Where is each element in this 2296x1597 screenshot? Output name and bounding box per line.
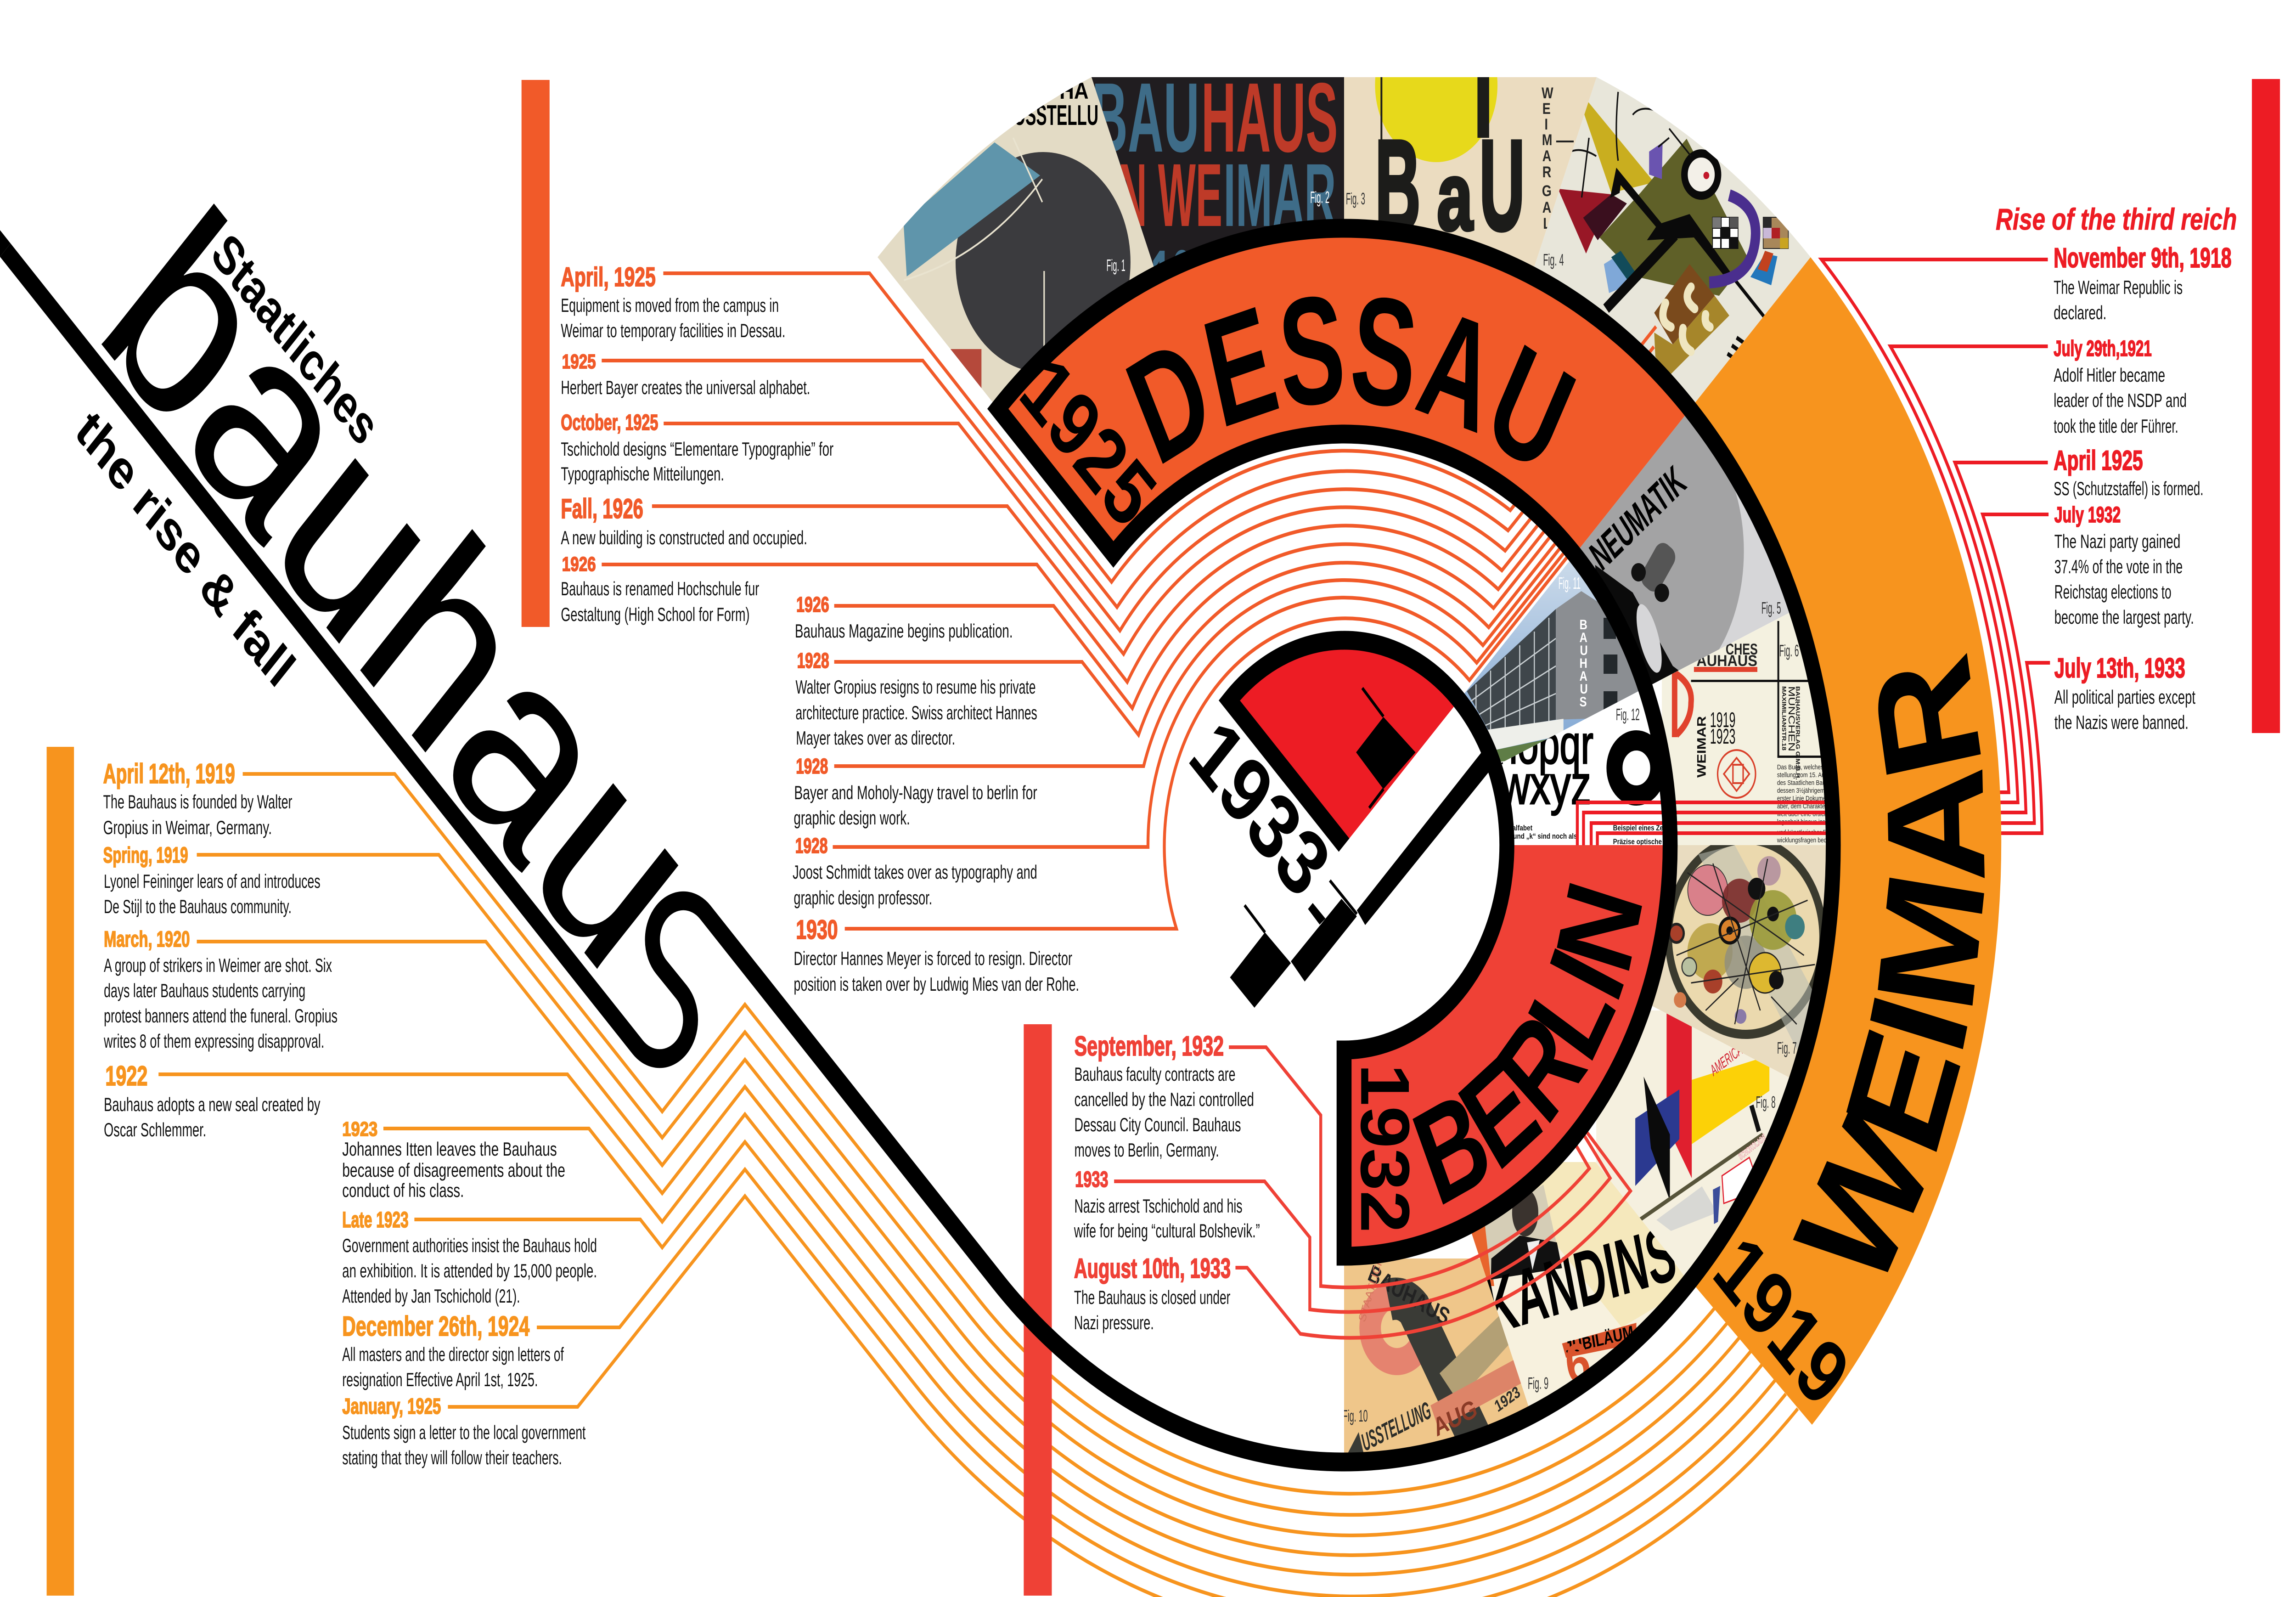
text block: Weimar events, second column: because of disagreements about the bbox=[342, 1160, 565, 1181]
figure 3: yellow circle poster: B bbox=[1375, 113, 1421, 257]
figure 6: Staatliches Bauhaus book cover: CHES bbox=[1726, 640, 1758, 658]
text block: Dessau events, first column: Fall, 1926 bbox=[561, 494, 643, 524]
text block: Dessau events, second column: architecture practice. Swiss architect Hannes bbox=[796, 702, 1037, 724]
figure 2: BAUHAUS IN WEIMAR poster: Fig. 2 bbox=[1310, 188, 1329, 207]
text block: third reich events: declared. bbox=[2054, 302, 2106, 324]
text block: Weimar events, first column: Oscar Schlemmer. bbox=[104, 1119, 206, 1141]
text block: third reich events: The Nazi party gained bbox=[2054, 531, 2180, 553]
text block: Dessau events, second column: 1928 bbox=[797, 649, 829, 672]
text block: Weimar events, second column: Government authorities insist the Bauhaus hold bbox=[342, 1235, 597, 1257]
text block: Weimar events, first column: De Stijl to the Bauhaus community. bbox=[104, 896, 292, 918]
text block: third reich events: become the largest party. bbox=[2054, 607, 2194, 628]
text block: third reich events: the Nazis were banned. bbox=[2054, 712, 2189, 734]
text block: Dessau events, second column: Bayer and Moholy-Nagy travel to berlin for bbox=[794, 782, 1037, 804]
figure 9: Kandinsky anniversary poster: JUBILÄUM bbox=[1564, 1322, 1635, 1358]
text block: Weimar events, first column: 1922 bbox=[105, 1061, 147, 1091]
figure 6: Staatliches Bauhaus book cover: wicklungsfragen bedeutet, so bbox=[1777, 836, 1848, 844]
figure 6: Staatliches Bauhaus book cover: weit über eine örtliche oder bbox=[1777, 810, 1843, 818]
band: Berlin 1932: BERLIN bbox=[1397, 868, 1666, 1234]
text block: Dessau events, second column: graphic design work. bbox=[794, 807, 910, 829]
side bar: third reich bbox=[2252, 79, 2280, 733]
text block: third reich events: November 9th, 1918 bbox=[2054, 243, 2232, 273]
text block: third reich events bbox=[2054, 243, 2232, 734]
figure 10: Bauhaus exhibition poster 1923 bbox=[1344, 1258, 1528, 1452]
figure 3: yellow circle poster: Fig. 3 bbox=[1346, 190, 1365, 208]
text block: Berlin events: September, 1932 bbox=[1075, 1031, 1224, 1061]
text block: Dessau events, first column: Equipment is moved from the campus in bbox=[561, 295, 779, 316]
figure 8: Lissitzky constructivist drawing: AMERICA bbox=[1707, 1041, 1745, 1079]
text block: Weimar events, first column: Gropius in Weimar, Germany. bbox=[103, 817, 272, 839]
text block: third reich events: leader of the NSDP and bbox=[2054, 390, 2187, 412]
figure 12: universal alphabet specimen: alfabet bbox=[1513, 824, 1532, 832]
text block: third reich events: April 1925 bbox=[2054, 446, 2143, 476]
text block: third reich events: Reichstag elections to bbox=[2054, 581, 2172, 603]
text block: Weimar events, first column: A group of strikers in Weimer are shot. Six bbox=[104, 955, 332, 976]
figure 1: poster with circle and blue form: HA bbox=[1059, 78, 1089, 104]
figure 10: Bauhaus exhibition poster 1923: USSTELLUNG bbox=[1358, 1397, 1434, 1456]
band: Berlin 1932: 1932 bbox=[1346, 1064, 1424, 1233]
text block: Dessau events, second column: Joost Schmidt takes over as typography and bbox=[793, 862, 1037, 883]
text block: Weimar events, first column: March, 1920 bbox=[104, 927, 190, 952]
figure 6: Staatliches Bauhaus book cover: WEIMAR bbox=[1694, 716, 1708, 778]
text block: Weimar events, second column bbox=[342, 1118, 597, 1469]
text block: Dessau events, first column bbox=[561, 263, 833, 626]
figure 7: Kandinsky circles: Fig. 7 bbox=[1777, 1039, 1797, 1057]
text block: Weimar events, first column: protest banners attend the funeral. Gropius bbox=[104, 1005, 338, 1027]
figure 4: Kandinsky composition bbox=[1535, 77, 1810, 402]
figure 6: Staatliches Bauhaus book cover: erster Linie Dokument dieser bbox=[1777, 795, 1847, 802]
band: Dessau 1925 bbox=[998, 228, 1690, 554]
text block: third reich events: took the title der Führer. bbox=[2054, 416, 2178, 437]
leader lines: Dessau timeline bbox=[602, 273, 1656, 929]
figure 6: Staatliches Bauhaus book cover: dessen 3½jährigem Bestehen bbox=[1777, 787, 1849, 794]
text block: Weimar events, first column: writes 8 of them expressing disapproval. bbox=[103, 1031, 324, 1052]
text block: Weimar events, first column bbox=[103, 759, 338, 1141]
figure 6: Staatliches Bauhaus book cover: MÜNCHEN bbox=[1787, 686, 1797, 751]
text block: Weimar events, first column: days later Bauhaus students carrying bbox=[104, 980, 305, 1002]
figure 9: Kandinsky anniversary poster: 6 bbox=[1561, 1330, 1595, 1396]
emblem: 1933 centre seal bbox=[1175, 641, 1507, 1050]
text block: Berlin events bbox=[1074, 1031, 1260, 1334]
text block: Berlin events: Bauhaus faculty contracts are bbox=[1075, 1064, 1235, 1085]
figure 1: poster with circle and blue form bbox=[878, 77, 1154, 402]
text block: Dessau events, first column: 1925 bbox=[562, 350, 596, 373]
figure 11: Dessau Bauhaus building: BAUHAUS bbox=[1580, 616, 1588, 710]
text block: Weimar events, first column: Lyonel Feininger lears of and introduces bbox=[104, 871, 321, 892]
figure 11: Dessau Bauhaus building: Fig. 11 bbox=[1559, 574, 1581, 593]
text block: Dessau events, second column: 1926 bbox=[796, 593, 829, 616]
figure 12: universal alphabet specimen bbox=[1480, 661, 1688, 847]
band: Weimar 1919 bbox=[1690, 257, 2015, 1426]
leader lines: rise of the third reich bbox=[1577, 260, 2050, 850]
figure 8: Lissitzky constructivist drawing bbox=[1596, 1010, 1789, 1274]
text block: Dessau events, first column: Herbert Bayer creates the universal alphabet. bbox=[561, 377, 810, 399]
text block: Weimar events, second column: conduct of his class. bbox=[342, 1180, 464, 1202]
figure 1: poster with circle and blue form: USSTELLU bbox=[1014, 99, 1098, 131]
heading: rise of the third reich: Rise of the third reich bbox=[1996, 202, 2237, 236]
side bar: Berlin bbox=[1024, 1024, 1052, 1596]
main black spiral line bbox=[0, 228, 1833, 1462]
figure 3: yellow circle poster: a bbox=[1437, 143, 1473, 250]
text block: Dessau events, second column: Walter Gropius resigns to resume his private bbox=[796, 677, 1036, 698]
text block: third reich events: July 29th,1921 bbox=[2054, 337, 2152, 361]
text block: Weimar events, second column: stating that they will follow their teachers. bbox=[342, 1447, 562, 1469]
figure 10: Bauhaus exhibition poster 1923: Fig. 10 bbox=[1343, 1407, 1368, 1425]
figure 3: yellow circle poster: WEIMARGAL bbox=[1542, 84, 1553, 232]
figure 6: Staatliches Bauhaus book cover: legenheit hinaus ins allgemeine bbox=[1777, 818, 1853, 825]
figure 6: Staatliches Bauhaus book cover: MAXIMILIANSTR.18 bbox=[1781, 686, 1787, 751]
figure 5: Neumatik grey poster: Fig. 5 bbox=[1761, 599, 1781, 617]
text block: Berlin events: cancelled by the Nazi controlled bbox=[1075, 1089, 1254, 1111]
text block: Weimar events, second column: 1923 bbox=[342, 1118, 377, 1140]
leader lines: Berlin timeline bbox=[1114, 1047, 1631, 1338]
text block: Berlin events: wife for being “cultural Bolshevik.” bbox=[1074, 1220, 1260, 1242]
side bar: Dessau bbox=[522, 80, 550, 627]
figure 6: Staatliches Bauhaus book cover bbox=[1662, 613, 1826, 845]
text block: Berlin events: 1933 bbox=[1075, 1168, 1108, 1192]
band: Dessau 1925: DESSAU bbox=[1108, 262, 1594, 505]
text block: Weimar events, first column: Bauhaus adopts a new seal created by bbox=[104, 1094, 321, 1116]
figure 12: universal alphabet specimen: Fig. 12 bbox=[1616, 705, 1640, 724]
text block: third reich events: The Weimar Republic is bbox=[2054, 277, 2183, 299]
figure 5: Neumatik grey poster bbox=[1580, 416, 1789, 684]
figure 10: Bauhaus exhibition poster 1923: STAATLICHES bbox=[1356, 1238, 1390, 1324]
text block: Weimar events, second column: All masters and the director sign letters of bbox=[342, 1344, 564, 1366]
band: Weimar 1919: 1919 bbox=[1699, 1217, 1864, 1426]
side bar: Weimar bbox=[47, 747, 74, 1596]
figure 3: yellow circle poster bbox=[1344, 77, 1597, 266]
figure 2: BAUHAUS IN WEIMAR poster: 19 bbox=[1151, 232, 1193, 332]
figure 1: poster with circle and blue form: Fig. 1 bbox=[1107, 256, 1125, 275]
text block: Dessau events, second column bbox=[793, 593, 1079, 995]
text block: third reich events: 37.4% of the vote in the bbox=[2054, 556, 2183, 578]
text block: Weimar events, second column: Students sign a letter to the local government bbox=[342, 1422, 586, 1444]
text block: Berlin events: Dessau City Council. Bauhaus bbox=[1075, 1114, 1241, 1136]
text block: Weimar events, first column: April 12th, 1919 bbox=[103, 759, 235, 789]
band: Dessau 1925: 1925 bbox=[1005, 338, 1171, 547]
text block: Dessau events, first column: Gestaltung (High School for Form) bbox=[561, 604, 750, 626]
text block: Dessau events, second column: 1928 bbox=[795, 834, 827, 858]
text block: Berlin events: Nazi pressure. bbox=[1074, 1312, 1154, 1334]
text block: Berlin events: Nazis arrest Tschichold and his bbox=[1075, 1196, 1243, 1217]
text block: Weimar events, second column: an exhibition. It is attended by 15,000 people. bbox=[342, 1260, 597, 1282]
title: Staatliches bauhaus, the rise and fall: bauhaus bbox=[59, 155, 825, 1121]
figure 6: Staatliches Bauhaus book cover: stellung vom 15. August bis 30 bbox=[1777, 771, 1851, 779]
title: Staatliches bauhaus, the rise and fall: Staatliches bbox=[203, 222, 388, 457]
text block: Dessau events, first column: Typographische Mitteilungen. bbox=[561, 463, 724, 485]
text block: third reich events: SS (Schutzstaffel) is formed. bbox=[2054, 478, 2203, 500]
figure 2: BAUHAUS IN WEIMAR poster: BAU bbox=[1092, 62, 1199, 173]
text block: third reich events: All political parties except bbox=[2054, 687, 2195, 708]
text block: third reich events: July 13th, 1933 bbox=[2054, 653, 2185, 683]
figure 10: Bauhaus exhibition poster 1923: BAUHAUS bbox=[1365, 1260, 1453, 1330]
text block: Dessau events, first column: Bauhaus is renamed Hochschule fur bbox=[561, 578, 759, 600]
text block: Weimar events, second column: resignation Effective April 1st, 1925. bbox=[342, 1369, 538, 1391]
emblem: 1933 centre seal: 1933 bbox=[1175, 701, 1345, 916]
text block: Dessau events, first column: 1926 bbox=[562, 553, 596, 576]
text block: Dessau events, first column: April, 1925 bbox=[561, 263, 656, 292]
text block: Dessau events, second column: graphic design professor. bbox=[794, 887, 932, 909]
figure 12: universal alphabet specimen: Beispiel eines Zeichens bbox=[1613, 824, 1683, 832]
text block: Dessau events, first column: October, 1925 bbox=[561, 411, 658, 435]
figure 9: Kandinsky anniversary poster: Fig. 9 bbox=[1528, 1374, 1548, 1393]
figure 6: Staatliches Bauhaus book cover: 1919 bbox=[1710, 708, 1735, 732]
figure 10: Bauhaus exhibition poster 1923: AUG bbox=[1429, 1394, 1480, 1442]
figure 2: BAUHAUS IN WEIMAR poster: IMAR bbox=[1223, 146, 1336, 245]
text block: Weimar events, second column: Attended by Jan Tschichold (21). bbox=[342, 1286, 520, 1307]
text block: Weimar events, first column: The Bauhaus is founded by Walter bbox=[103, 791, 293, 813]
text block: Berlin events: The Bauhaus is closed under bbox=[1074, 1287, 1230, 1309]
figure 6: Staatliches Bauhaus book cover: und künstlerischer Erziehung. bbox=[1777, 829, 1849, 836]
white centre disc behind the Dessau timeline lines bbox=[1018, 434, 1670, 1256]
text block: Berlin events: August 10th, 1933 bbox=[1074, 1253, 1231, 1284]
figure 12: universal alphabet specimen: Präzise optische Wirkung bbox=[1613, 838, 1688, 846]
text block: Weimar events, second column: Late 1923 bbox=[342, 1208, 409, 1232]
figure 2: BAUHAUS IN WEIMAR poster: HAUS bbox=[1201, 62, 1338, 173]
figure 5: Neumatik grey poster: NEUMATIK bbox=[1583, 457, 1692, 579]
figure 6: Staatliches Bauhaus book cover: des Staatlichen Bauhauses bbox=[1777, 779, 1843, 786]
figure 4: Kandinsky composition: Fig. 4 bbox=[1543, 251, 1564, 269]
text block: Dessau events, second column: Director Hannes Meyer is forced to resign. Director bbox=[794, 948, 1072, 970]
band: Weimar 1919: WEIMAR bbox=[1767, 643, 2015, 1315]
figure 6: Staatliches Bauhaus book cover: Fig. 6 bbox=[1779, 642, 1799, 660]
figure 2: BAUHAUS IN WEIMAR poster bbox=[1092, 77, 1344, 266]
text block: Dessau events, second column: 1928 bbox=[796, 754, 828, 778]
figure 6: Staatliches Bauhaus book cover: Das Buch, welches anläßlich bbox=[1777, 763, 1847, 771]
text block: Weimar events, first column: Spring, 1919 bbox=[103, 843, 188, 868]
figure 7: Kandinsky circles bbox=[1652, 845, 1826, 1078]
text block: Dessau events, first column: Tschichold designs “Elementare Typographie” for bbox=[561, 439, 833, 460]
text block: Dessau events, second column: Mayer takes over as director. bbox=[796, 728, 955, 749]
text block: Dessau events, second column: Bauhaus Magazine begins publication. bbox=[795, 621, 1013, 642]
text block: Weimar events, second column: Johannes Itten leaves the Bauhaus bbox=[342, 1139, 557, 1160]
text block: Dessau events, first column: Weimar to temporary facilities in Dessau. bbox=[561, 320, 785, 342]
text block: Berlin events: moves to Berlin, Germany. bbox=[1075, 1140, 1219, 1161]
figure 6: Staatliches Bauhaus book cover: AUHAUS bbox=[1696, 652, 1757, 670]
figure 6: Staatliches Bauhaus book cover: 1923 bbox=[1710, 724, 1735, 748]
text block: third reich events: Adolf Hitler became bbox=[2054, 365, 2165, 386]
figure 2: BAUHAUS IN WEIMAR poster: N WE bbox=[1118, 146, 1222, 245]
figure 12: universal alphabet specimen: „g“ und „k“ sind noch als bbox=[1502, 832, 1577, 841]
leader lines: Weimar timeline bbox=[158, 774, 1798, 1597]
figure 6: Staatliches Bauhaus book cover: aber, dem Charakter der Anstalt bbox=[1777, 802, 1854, 810]
figure 9: Kandinsky anniversary poster bbox=[1472, 1162, 1685, 1406]
figure 10: Bauhaus exhibition poster 1923: 1923 bbox=[1492, 1383, 1523, 1416]
figure 8: Lissitzky constructivist drawing: Fig. 8 bbox=[1756, 1093, 1776, 1112]
text block: Weimar events, second column: January, 1925 bbox=[342, 1394, 441, 1419]
title: Staatliches bauhaus, the rise and fall: the rise & fall bbox=[67, 399, 304, 698]
text block: third reich events: July 1932 bbox=[2054, 503, 2121, 527]
figure 12: universal alphabet specimen: wxyz bbox=[1500, 754, 1591, 815]
text block: Weimar events, second column: December 26th, 1924 bbox=[342, 1311, 529, 1342]
figure 9: Kandinsky anniversary poster: KANDINS bbox=[1478, 1208, 1682, 1351]
figure 11: Dessau Bauhaus building bbox=[1451, 561, 1638, 762]
text block: Dessau events, second column: position is taken over by Ludwig Mies van der Rohe. bbox=[794, 974, 1079, 995]
figure 6: Staatliches Bauhaus book cover: BAUHAUSVERLAG G.M.B.H. bbox=[1795, 686, 1801, 780]
text block: Dessau events, first column: A new building is constructed and occupied. bbox=[561, 527, 807, 549]
figure 12: universal alphabet specimen: nopqr bbox=[1497, 713, 1593, 775]
figure 3: yellow circle poster: U bbox=[1479, 113, 1525, 257]
figure 8: Lissitzky constructivist drawing: SCHOKOLADE bbox=[1737, 1132, 1767, 1162]
text block: Dessau events, second column: 1930 bbox=[796, 915, 838, 945]
